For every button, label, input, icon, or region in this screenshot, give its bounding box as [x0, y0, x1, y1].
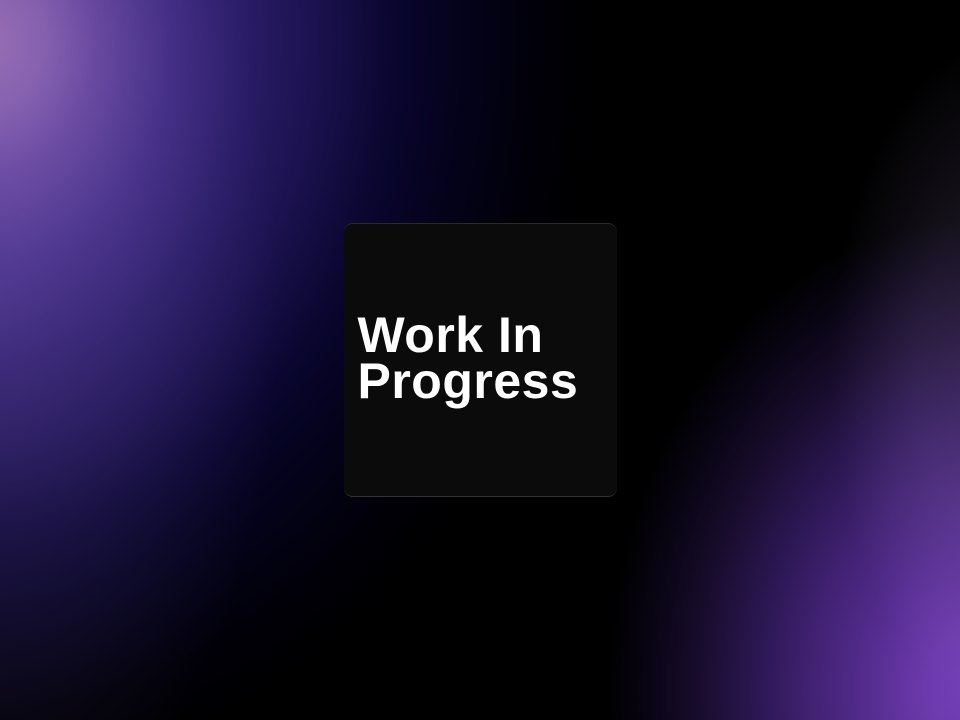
panel: dark card	[344, 223, 617, 497]
title	[358, 307, 578, 409]
title: Work In	[358, 307, 543, 363]
title: Progress	[358, 353, 578, 409]
